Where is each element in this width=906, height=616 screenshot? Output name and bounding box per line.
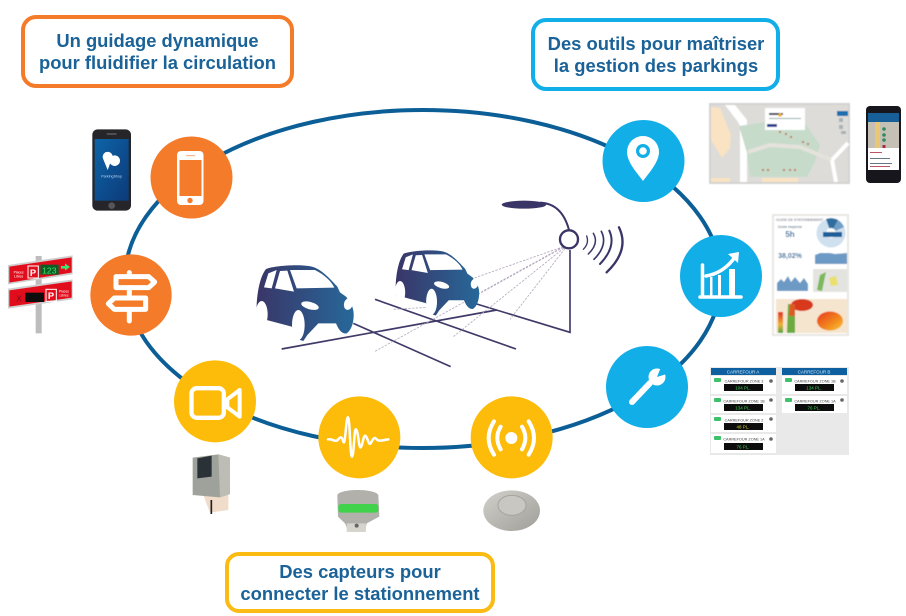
photo: ceiling sensor with green light bbox=[337, 490, 379, 532]
status row B2: 76 PL. bbox=[807, 406, 821, 410]
heading: sensors bbox=[227, 554, 493, 611]
sign: bottom panel: Places bbox=[59, 290, 69, 294]
status row A2: CARREFOUR ZONE 1B bbox=[723, 400, 765, 404]
sign: bottom panel: Libres bbox=[59, 294, 69, 298]
sign: top panel: Libres bbox=[14, 274, 24, 278]
icon: radio signal bbox=[471, 396, 553, 478]
icon: vibration wave bbox=[318, 396, 400, 478]
heading: dynamic guidance: pour fluidifier la circulation bbox=[39, 52, 276, 73]
sign: top panel: 123 bbox=[42, 265, 57, 275]
screenshot: sensor status panel bbox=[710, 367, 849, 455]
icon: location pin bbox=[602, 120, 684, 202]
status row A1 bbox=[711, 376, 776, 394]
status row A2: 134 PL. bbox=[735, 406, 751, 410]
sign: bottom panel: X bbox=[16, 294, 22, 304]
icon: smartphone bbox=[150, 136, 232, 218]
sign: top panel bbox=[8, 255, 73, 284]
status row A1: CARREFOUR ZONE 3 bbox=[725, 380, 763, 384]
map toolbar bbox=[837, 111, 848, 134]
icon: rising chart bbox=[680, 235, 762, 317]
icon: video camera bbox=[174, 360, 256, 442]
status row A1: 104 PL. bbox=[735, 386, 751, 390]
ring connecting the icons bbox=[125, 110, 721, 448]
status row A2 bbox=[711, 396, 776, 413]
map markers bbox=[762, 131, 809, 171]
photo: round ground sensor bbox=[483, 490, 540, 531]
status row A3: CARREFOUR ZONE 2 bbox=[725, 418, 763, 422]
status row B2: CARREFOUR ZONE 1A bbox=[794, 400, 836, 404]
car: rear bbox=[395, 250, 479, 315]
parking lines bbox=[282, 250, 570, 367]
street lamp bbox=[502, 201, 578, 248]
donut chart bbox=[816, 218, 846, 248]
sign: top panel: P bbox=[30, 268, 36, 278]
screenshot: analytics dashboard: 38,02% bbox=[778, 253, 803, 260]
screenshot: analytics dashboard: 5h bbox=[785, 230, 795, 239]
car: front bbox=[256, 265, 354, 341]
wireless signal waves bbox=[583, 227, 623, 272]
screenshot: analytics dashboard: Durée moyenne bbox=[778, 225, 802, 229]
column header B: CARREFOUR B bbox=[798, 370, 830, 374]
column header A: CARREFOUR A bbox=[727, 370, 759, 374]
icon: wrench bbox=[606, 346, 688, 428]
status row B2 bbox=[782, 396, 847, 413]
sensor beams bbox=[375, 247, 565, 351]
status row A4: CARREFOUR ZONE 1A bbox=[723, 438, 765, 442]
sign: bottom panel: P bbox=[48, 291, 54, 301]
occupancy bars bbox=[815, 253, 847, 264]
status row A4 bbox=[711, 434, 776, 453]
heading: management tools: Des outils pour maîtriser bbox=[548, 33, 764, 54]
map popup bbox=[765, 108, 805, 130]
sign: top panel: Places bbox=[14, 270, 24, 274]
screenshot: parking map bbox=[709, 103, 850, 184]
heat map bbox=[776, 299, 847, 333]
status row A4: 76 PL. bbox=[736, 444, 750, 450]
status row A3: 48 PL. bbox=[736, 424, 750, 430]
photo: camera sensor box bbox=[193, 454, 230, 514]
photo: dynamic parking signs bbox=[8, 255, 73, 333]
heading: sensors: Des capteurs pour bbox=[279, 561, 441, 582]
heading: management tools: la gestion des parkings bbox=[554, 55, 758, 76]
screenshot: analytics dashboard: GUIDE DE STATIONNEMENT bbox=[776, 218, 824, 222]
mini map bbox=[813, 269, 847, 292]
screenshot: mobile map app bbox=[866, 106, 901, 183]
screenshot: analytics dashboard bbox=[772, 214, 849, 336]
central scene: cars under a smart street lamp bbox=[256, 201, 623, 367]
heading: sensors: connecter le stationnement bbox=[240, 583, 480, 604]
heading: dynamic guidance bbox=[23, 17, 292, 86]
icon: signpost bbox=[90, 254, 172, 336]
status row B1 bbox=[782, 376, 847, 394]
status row B1: 134 PL. bbox=[806, 386, 822, 390]
heading: management tools bbox=[533, 20, 778, 89]
status row A3 bbox=[711, 415, 776, 432]
heading: dynamic guidance: Un guidage dynamique bbox=[56, 30, 259, 51]
sign: bottom panel bbox=[8, 279, 73, 309]
status row B1: CARREFOUR ZONE 1B bbox=[794, 380, 836, 384]
photo: smartphone with app bbox=[92, 129, 131, 211]
app logo: ParkingShop bbox=[101, 174, 122, 178]
